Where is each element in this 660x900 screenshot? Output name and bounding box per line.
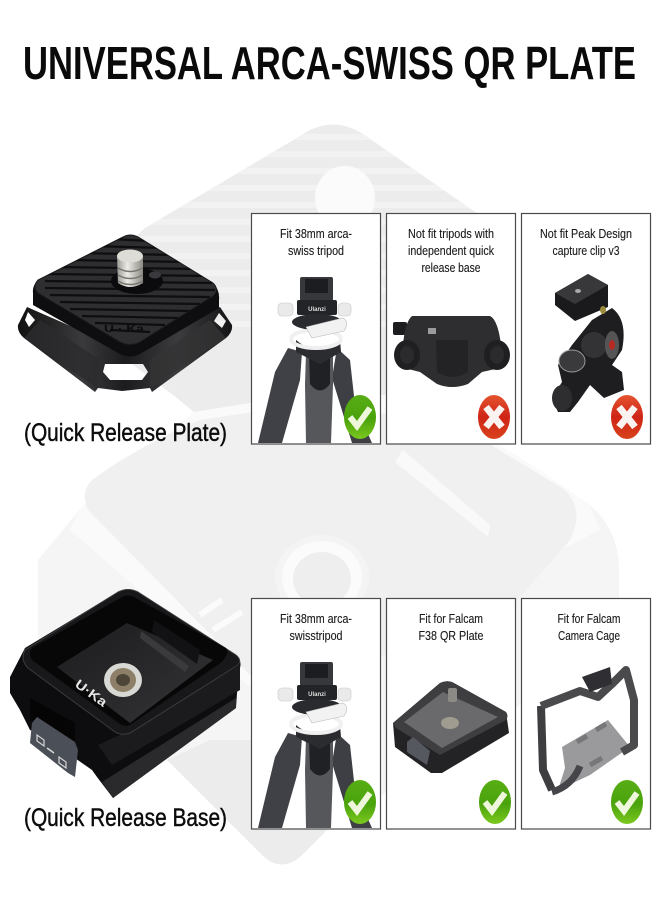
icon: check [611,780,643,824]
label: quick release plate: (Quick Release Plate) [24,419,227,447]
plate screw [117,256,143,287]
product: quick release plate: U · Ka [104,324,145,335]
panel: fit falcam camera cage [522,598,650,829]
product: quick release plate [18,235,232,392]
icon: check [344,780,376,824]
caption: Not fit Peak Design [540,227,632,241]
tripod photo [258,662,372,828]
falcam plate photo [393,681,509,773]
caption: release base [422,261,481,275]
base rim [23,590,240,734]
caption: Camera Cage [558,629,620,643]
product: quick release base: U·Ka [72,676,111,710]
caption: Fit for Falcam [558,612,620,626]
geared head photo [552,274,624,412]
icon: check [344,395,376,439]
panel: not fit peak design clip [522,214,650,444]
icon: cross [611,395,643,439]
icon: cross [478,395,510,439]
capture clip photo [393,316,510,387]
panel: fit 38mm arca-swiss tripod, base [252,598,380,829]
tripod photo [258,277,372,443]
ghost image: enlarged quick release base [38,395,619,864]
base right face and rail [98,665,240,765]
plate lower frame [18,307,232,392]
caption: swiss tripod [288,244,344,258]
icon: check [479,780,511,824]
caption: Fit 38mm arca- [280,227,352,241]
caption: Fit for Falcam [419,612,483,626]
panel: fit 38mm arca-swiss tripod [252,214,380,444]
caption: swisstripod [290,629,343,643]
camera cage photo [541,667,634,792]
base cavity [30,596,228,726]
ghost image: enlarged quick release plate [132,124,476,412]
caption: capture clip v3 [552,244,620,258]
caption: independent quick [408,244,495,258]
base lever [30,698,75,745]
product: quick release base [10,590,240,798]
base outer body [10,590,240,798]
base slot [140,631,189,672]
panel: not fit independent base [386,214,516,444]
plate body [33,235,219,356]
panel: fit falcam f38 qr plate [386,598,516,829]
label: quick release base: (Quick Release Base) [24,804,227,832]
base screw hole [104,663,142,697]
plate ridges [45,239,215,332]
caption: F38 QR Plate [418,629,484,643]
caption: Fit 38mm arca- [280,612,352,626]
caption: Not fit tripods with [408,227,494,241]
